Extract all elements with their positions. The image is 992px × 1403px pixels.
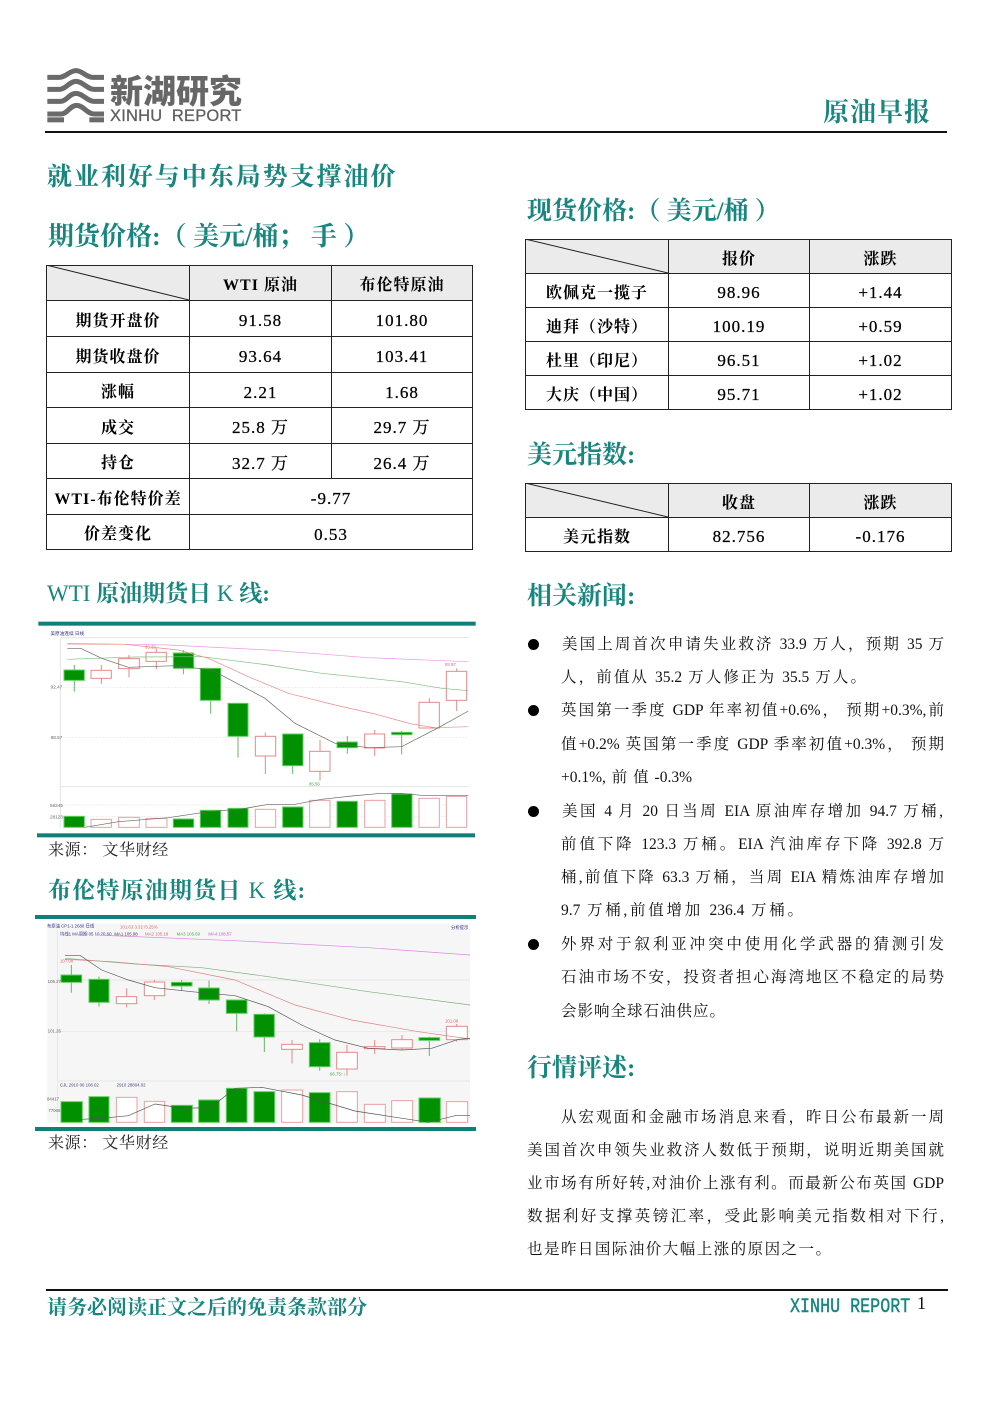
heading: futures prices: 期货价格:（ 美元/桶； 手 ）: [48, 222, 369, 251]
table: spot prices: 迪拜（沙特）: [546, 318, 648, 336]
table: futures prices: WTI 原油: [223, 277, 298, 294]
commentary text: 也是昨日国际油价大幅上涨的原因之一。: [527, 1241, 831, 1258]
chart: WTI candlestick: 95.32: [145, 644, 156, 649]
table: dollar index: 收盘: [722, 494, 756, 512]
heading: Brent daily chart: 布伦特原油期货日 K 线:: [48, 878, 306, 903]
chart: Brent candlestick: 布原油 CP1-1 2680 日线: [47, 923, 95, 930]
table: futures prices: 26.4 万: [374, 454, 430, 472]
icon: wave stripes: [47, 68, 104, 122]
table: futures prices: 1.68: [385, 382, 419, 402]
chart: Brent candlestick: 101.09: [445, 1018, 459, 1023]
table: futures prices: 103.41: [376, 347, 428, 366]
title: 就业利好与中东局势支撑油价: [47, 164, 397, 191]
table: spot prices: 大庆（中国）: [546, 386, 648, 404]
chart: Brent candlestick: 101.26: [48, 1029, 61, 1034]
table: futures prices: -9.77: [311, 489, 351, 508]
commentary text: 数据利好支撑英镑汇率，受此影响美元指数相对下行,: [527, 1208, 944, 1225]
table: spot prices: 涨跌: [863, 250, 898, 268]
table: futures prices: 2.21: [244, 382, 277, 402]
table: futures prices: 期货收盘价: [75, 348, 160, 366]
chart: Brent candlestick: 101.63 3.32 /3.25%: [120, 925, 158, 930]
chart: WTI candlestick: 美原油连续 日线: [50, 630, 85, 637]
chart: Brent candlestick: [35, 915, 476, 1131]
table: spot prices: 杜里（印尼）: [546, 352, 648, 370]
chart: WTI candlestick: [37, 622, 476, 838]
news list: [528, 636, 944, 1020]
chart: Brent candlestick: 96.75↑↓: [330, 1071, 345, 1076]
table: spot prices: +1.44: [858, 283, 903, 302]
news list: 值+0.2% 英国第一季度 GDP 季率初值+0.3%， 预期: [561, 736, 944, 753]
table: spot prices: 欧佩克一揽子: [546, 284, 648, 302]
table: spot prices: 95.71: [717, 385, 761, 404]
moving averages: [65, 935, 470, 1050]
table: spot prices: 100.19: [713, 317, 765, 336]
chart: WTI candlestick: 28123: [50, 814, 63, 819]
moving averages: [67, 643, 468, 748]
heading: market commentary: 行情评述:: [527, 1055, 635, 1082]
chart: WTI candlestick: 85.56: [309, 781, 320, 786]
news list: 人，前值从 35.2 万人修正为 35.5 万人。: [561, 669, 866, 686]
table: spot prices: [525, 239, 952, 410]
table: futures prices: WTI-布伦特价差: [54, 490, 182, 508]
logo text: Chinese name: 新湖研究: [110, 73, 242, 110]
heading: dollar index: 美元指数:: [527, 442, 635, 469]
table: spot prices: 98.96: [717, 283, 761, 302]
table: futures prices: 涨幅: [101, 384, 135, 401]
table: spot prices: +1.02: [858, 351, 903, 370]
chart: Brent candlestick: MA2 105.18: [145, 931, 169, 936]
news list: 前值下降 123.3 万桶。EIA 汽油库存下降 392.8 万: [561, 836, 944, 853]
news list: 美国 4 月 20 日当周 EIA 原油库存增加 94.7 万桶,: [562, 803, 943, 820]
header rule: [45, 131, 947, 133]
heading: WTI daily chart: WTI 原油期货日 K 线:: [47, 581, 270, 606]
table: futures prices: [46, 265, 473, 550]
table: futures prices: 价差变化: [84, 526, 152, 543]
chart: Brent candlestick: MA1 105.98: [114, 931, 138, 936]
table: dollar index: 美元指数: [563, 528, 631, 546]
table: futures prices: 25.8 万: [232, 418, 289, 437]
news list: 英国第一季度 GDP 年率初值+0.6%， 预期+0.3%,前: [561, 702, 944, 719]
table: futures prices: 91.58: [239, 311, 282, 330]
table: futures prices: 期货开盘价: [75, 312, 160, 330]
chart: Brent candlestick: 107.08: [60, 958, 74, 963]
commentary text: [527, 1108, 944, 1258]
heading: related news: 相关新闻:: [527, 583, 635, 610]
chart: Brent candlestick: CJL 2910 06 108 02: [60, 1083, 99, 1088]
table: spot prices: +0.59: [858, 317, 903, 336]
news list: 桶,前值下降 63.3 万桶，当周 EIA 精炼油库存增加: [561, 869, 944, 886]
table: dollar index: 涨跌: [863, 494, 898, 512]
table: futures prices: 0.53: [314, 524, 348, 544]
chart: WTI candlestick: 56245: [50, 803, 63, 808]
source note: WTI chart: 来源： 文华财经: [48, 842, 169, 859]
chart: Brent candlestick: 分析提示: [451, 924, 469, 931]
chart: WTI candlestick: 88.57: [51, 735, 63, 740]
news list: 外界对于叙利亚冲突中使用化学武器的猜测引发: [561, 936, 944, 953]
candles: [64, 648, 467, 781]
commentary text: 从宏观面和金融市场消息来看，昨日公布最新一周: [561, 1109, 944, 1126]
table: futures prices: 93.64: [239, 347, 282, 366]
footer brand: XINHU REPORT: [790, 1296, 910, 1319]
chart: Brent candlestick: MA4 108.57: [208, 931, 232, 936]
logo: Xinhu Report: [47, 68, 242, 125]
news list: 美国上周首次申请失业救济 33.9 万人，预期 35 万: [562, 636, 944, 653]
chart: Brent candlestick: 105.27: [48, 979, 61, 984]
chart: WTI candlestick: 93.97: [445, 662, 456, 667]
commentary text: 业市场有所好转,对油价上涨有利。而最新公布英国 GDP: [527, 1175, 944, 1192]
table: dollar index: 82.756: [713, 527, 765, 546]
table: futures prices: 成交: [101, 420, 135, 436]
footer rule: [46, 1289, 948, 1291]
news list: 9.7 万桶,前值增加 236.4 万桶。: [561, 902, 803, 919]
chart: Brent candlestick: 77066: [48, 1108, 61, 1113]
table: futures prices: 29.7 万: [374, 418, 430, 437]
candles: [61, 965, 467, 1076]
chart: Brent candlestick: 84417: [47, 1097, 60, 1102]
table: futures prices: 32.7 万: [232, 454, 289, 472]
chart: Brent candlestick: 2910 28804.02: [117, 1083, 146, 1088]
table: spot prices: 报价: [722, 250, 756, 268]
chart: Brent candlestick: MA3 105.69: [177, 931, 201, 936]
table: futures prices: 持仓: [101, 455, 135, 472]
volume bars: [64, 794, 467, 827]
news list: +0.1%,前值-0.3%: [561, 769, 692, 786]
chart: Brent candlestick: 均线1 MA周期 05 10 20 60: [60, 930, 112, 937]
page number: 1: [917, 1293, 926, 1313]
footer disclaimer: 请务必阅读正文之后的免责条款部分: [47, 1297, 367, 1319]
table: futures prices: 101.80: [376, 311, 428, 330]
heading: spot prices: 现货价格:（ 美元/桶 ）: [527, 198, 780, 225]
table: spot prices: +1.02: [858, 385, 903, 404]
table: spot prices: 96.51: [717, 351, 761, 370]
source note: Brent chart: 来源： 文华财经: [48, 1135, 169, 1152]
logo text: English name: XINHU REPORT: [110, 107, 242, 125]
commentary text: 美国首次申领失业救济人数低于预期，说明近期美国就: [527, 1142, 944, 1159]
table: dollar index: [525, 483, 952, 552]
news list: 石油市场不安，投资者担心海湾地区不稳定的局势: [561, 969, 944, 986]
chart: WTI candlestick: 92.47: [51, 685, 63, 690]
table: dollar index: -0.176: [856, 527, 905, 546]
news list: 会影响全球石油供应。: [561, 1003, 725, 1020]
report name: 原油早报: [823, 98, 931, 127]
volume bars: [61, 1088, 468, 1122]
table: futures prices: 布伦特原油: [359, 277, 444, 294]
